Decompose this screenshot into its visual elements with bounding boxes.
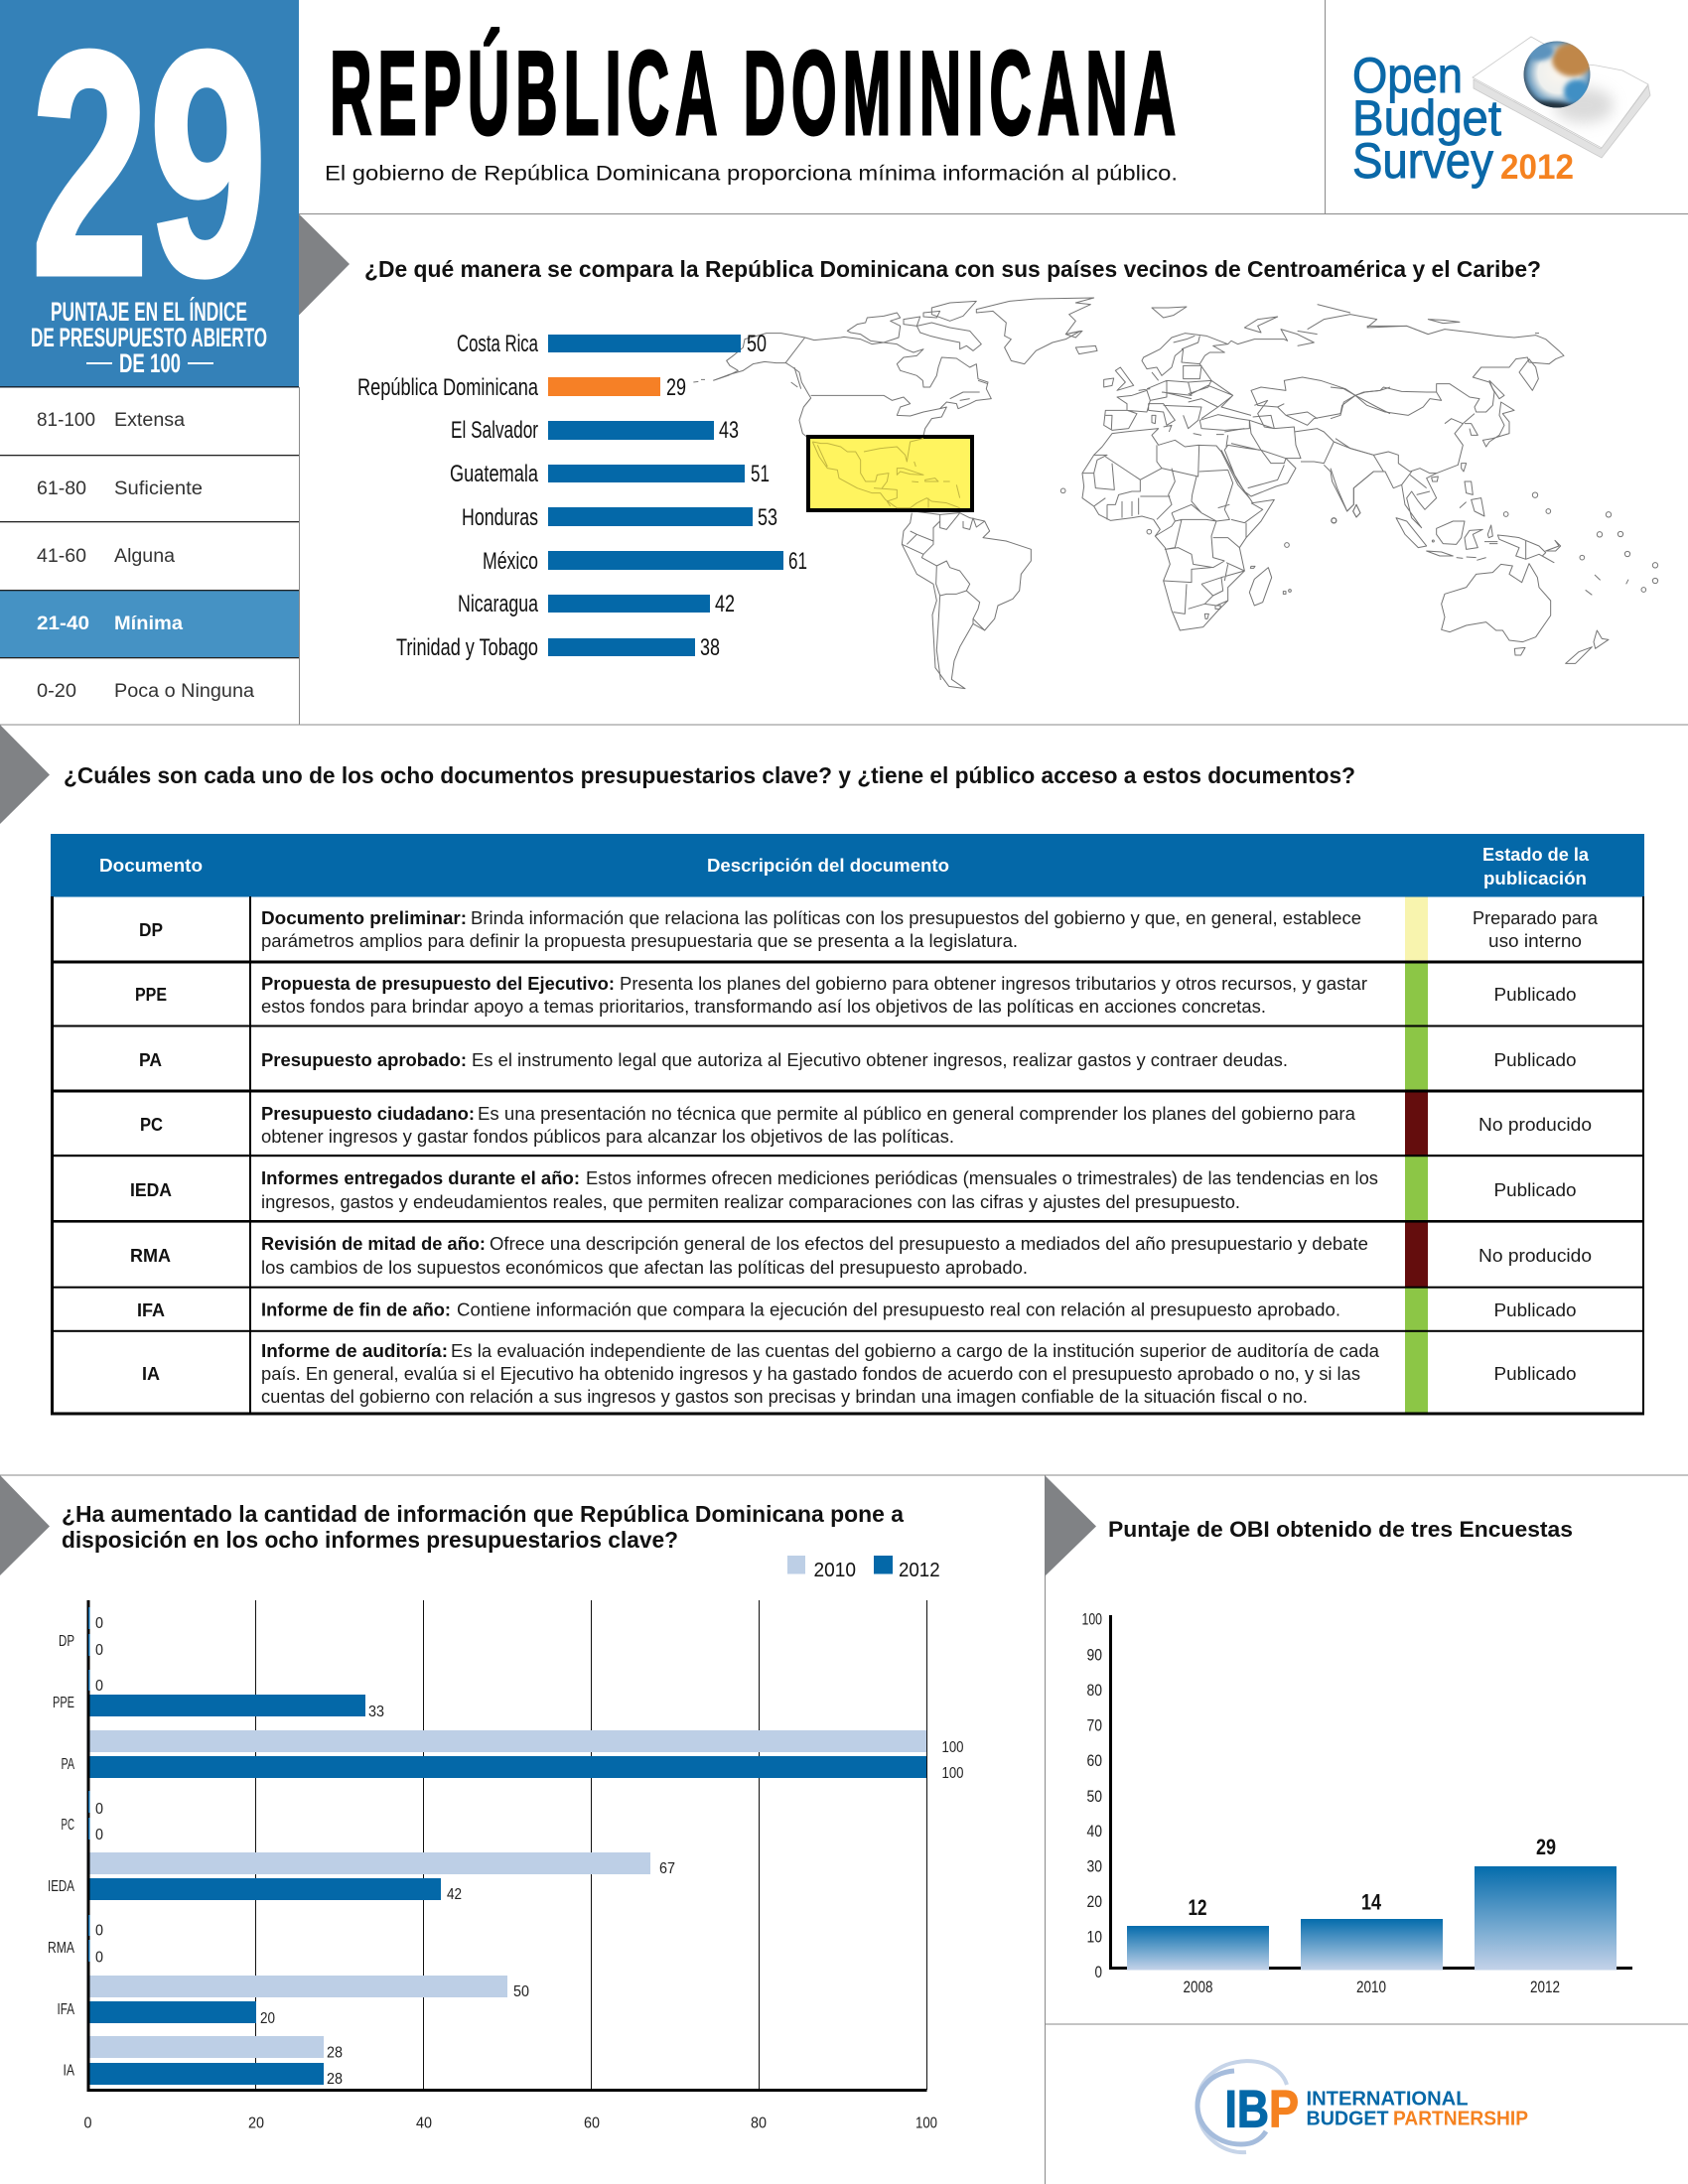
panel: score ranges legend: 0-20 xyxy=(37,681,76,702)
row: PA: Es el instrumento legal que autoriza al Ejecutivo obtener ingresos, realizar gastos y contraer deudas. xyxy=(472,1049,1288,1070)
México bar: 61 xyxy=(788,548,807,575)
row: IFA: Informe de fin de año: xyxy=(261,1298,451,1320)
chart value labels: 20 xyxy=(260,2010,275,2027)
logo: International Budget Partnership: P xyxy=(1269,2081,1299,2138)
row: IA: Publicado xyxy=(1493,1363,1577,1384)
chart value labels: 33 xyxy=(368,1704,384,1720)
y-axis labels: 0 xyxy=(1094,1963,1102,1981)
chart value labels: 0 xyxy=(95,1950,103,1966)
y-axis labels: 90 xyxy=(1086,1646,1102,1664)
logo: International Budget Partnership: IB xyxy=(1225,2081,1269,2138)
row: PPE xyxy=(135,973,1577,1017)
icon: IBP swoosh xyxy=(1197,2061,1287,2152)
chart x-axis labels: 60 xyxy=(584,2115,600,2132)
chart category labels: IEDA xyxy=(48,1878,74,1895)
row: RMA: los cambios de los supuestos económicos que afectan las políticas del presupuesto aprobado. xyxy=(261,1257,1028,1278)
row: IA: Es la evaluación independiente de las cuentas del gobierno a cargo de la institución superior de auditoría de cada xyxy=(451,1340,1380,1361)
row: DP xyxy=(139,907,1599,951)
chart x-axis labels: 40 xyxy=(416,2115,432,2132)
El Salvador bar: 43 xyxy=(719,417,739,444)
Nicaragua bar: 42 xyxy=(715,591,735,617)
heading: neighbours comparison: ¿De qué manera se compara la República Dominicana con sus países vecinos de Centroamérica y el Caribe? xyxy=(364,256,1541,282)
row: IA: Informe de auditoría: xyxy=(261,1340,448,1361)
row: PPE: Presenta los planes del gobierno para obtener ingresos tributarios y otros recursos, y gastar xyxy=(620,973,1367,994)
y-axis labels: 20 xyxy=(1086,1892,1102,1911)
map: Europe, Africa, Middle East xyxy=(1060,305,1428,630)
bar year labels xyxy=(1184,1978,1560,1996)
row: IFA xyxy=(137,1298,1577,1320)
bar value labels xyxy=(1188,1835,1556,1920)
row: IA: país. En general, evalúa si el Ejecutivo ha obtenido ingresos y ha gastado fondos de acuerdo con el presupuesto aprobado o no, y si las xyxy=(261,1363,1360,1384)
México bar xyxy=(483,548,807,575)
Honduras bar xyxy=(462,504,777,531)
status colour column xyxy=(1405,897,1428,1414)
row: PC xyxy=(140,1103,1592,1147)
panel: score ranges legend: Suficiente xyxy=(114,478,203,499)
map: Asia and Oceania xyxy=(1331,320,1658,663)
chart value labels: 28 xyxy=(327,2045,343,2061)
bar value labels: 12 xyxy=(1188,1895,1207,1920)
legend: 2010 and 2012 xyxy=(787,1556,940,1581)
icon: book and globe xyxy=(1473,37,1650,158)
score caption: DE PRESUPUESTO ABIERTO xyxy=(31,323,267,352)
panel: score ranges legend: Alguna xyxy=(114,546,175,567)
arrow: section 1 xyxy=(299,214,350,316)
logo: International Budget Partnership: PARTNERSHIP xyxy=(1393,2109,1528,2130)
chart category labels: DP xyxy=(59,1633,74,1650)
row: PC: obtener ingresos y gastar fondos públicos para alcanzar los objetivos de las políticas. xyxy=(261,1126,954,1147)
Honduras bar: 53 xyxy=(758,504,777,531)
bar value labels: 14 xyxy=(1361,1890,1382,1914)
Trinidad y Tobago bar: Trinidad y Tobago xyxy=(396,634,538,661)
table header: Documento xyxy=(99,855,203,876)
row: IEDA xyxy=(130,1167,1577,1212)
row: IFA: IFA xyxy=(137,1299,165,1320)
El Salvador bar xyxy=(451,417,739,444)
row: IEDA: ingresos, gastos y endeudamientos reales, que permiten realizar comparaciones con las cifras y ajustes del presupuesto. xyxy=(261,1191,1240,1212)
y-axis labels: 70 xyxy=(1086,1715,1102,1735)
heading: information availability: disposición en los ocho informes presupuestarios clave? xyxy=(62,1527,678,1553)
y-axis labels xyxy=(1082,1610,1102,1981)
map: Americas xyxy=(693,298,1094,689)
chart x-axis labels: 20 xyxy=(248,2115,264,2132)
row: PPE: Publicado xyxy=(1493,984,1577,1005)
chart value labels: 0 xyxy=(95,1642,103,1659)
bar year labels: 2010 xyxy=(1356,1978,1386,1996)
row: DP: DP xyxy=(139,919,163,940)
score caption: DE 100 xyxy=(119,348,181,378)
table: eight budget documents xyxy=(51,834,1644,1416)
Guatemala bar: 51 xyxy=(751,461,770,487)
table header: Descripción del documento xyxy=(707,855,949,876)
panel: score ranges legend: 21-40 xyxy=(37,614,89,634)
Costa Rica bar: 50 xyxy=(747,331,767,357)
logo: Open Budget Survey 2012: Survey xyxy=(1352,133,1493,189)
row: DP: Preparado para xyxy=(1473,907,1599,928)
row: PA: Presupuesto aprobado: xyxy=(261,1049,467,1070)
legend: 2010 and 2012: 2010 xyxy=(814,1560,856,1581)
Costa Rica bar: Costa Rica xyxy=(457,331,538,357)
row: IA: IA xyxy=(142,1363,160,1384)
y-axis labels: 50 xyxy=(1086,1787,1102,1806)
chart value labels: 100 xyxy=(941,1739,964,1756)
row: DP: uso interno xyxy=(1488,930,1582,951)
Nicaragua bar xyxy=(458,591,735,617)
bar year labels: 2012 xyxy=(1530,1978,1560,1996)
Trinidad y Tobago bar xyxy=(396,634,720,661)
y-axis labels: 60 xyxy=(1086,1751,1102,1770)
score caption: PUNTAJE EN EL ÍNDICE xyxy=(51,296,247,327)
row: DP: Brinda información que relaciona las políticas con los presupuestos del gobierno y que, en general, establece xyxy=(471,907,1361,928)
chart category labels: PPE xyxy=(53,1695,74,1711)
bar chart: documents 2010 vs 2012 xyxy=(48,1600,964,2132)
y-axis labels: 10 xyxy=(1086,1928,1102,1946)
y-axis labels: 40 xyxy=(1086,1822,1102,1841)
logo: International Budget Partnership xyxy=(1197,2061,1528,2152)
El Salvador bar: El Salvador xyxy=(451,417,538,444)
map: highlighted region xyxy=(808,437,972,510)
Guatemala bar: Guatemala xyxy=(450,461,538,487)
table header: Estado de la xyxy=(1482,844,1590,865)
South America xyxy=(902,511,1031,689)
row: PPE: PPE xyxy=(135,984,167,1005)
row: IA: cuentas del gobierno con relación a sus ingresos y gastos son precisas y brindan una imagen confiable de la situación fiscal o no. xyxy=(261,1386,1308,1407)
República Dominicana bar: 29 xyxy=(666,374,686,401)
score caption xyxy=(31,296,267,378)
row: IFA: Contiene información que compara la ejecución del presupuesto real con relación al presupuesto aprobado. xyxy=(457,1298,1340,1320)
bar value labels: 29 xyxy=(1536,1835,1556,1859)
row: PPE: estos fondos para brindar apoyo a temas prioritarios, transformando así los objetivos de las políticas en acciones concretas. xyxy=(261,996,1266,1017)
logo: Open Budget Survey 2012 xyxy=(1352,37,1650,189)
subtitle: El gobierno de República Dominicana proporciona mínima información al público. xyxy=(325,161,1178,185)
row: IA xyxy=(142,1340,1577,1407)
table header xyxy=(51,834,1644,897)
panel: score ranges legend: Mínima xyxy=(114,614,183,634)
y-axis labels: 100 xyxy=(1082,1610,1102,1628)
chart category labels: RMA xyxy=(48,1940,74,1957)
chart value labels xyxy=(95,1615,964,2088)
chart category labels: PA xyxy=(62,1756,74,1773)
chart value labels: 0 xyxy=(95,1678,103,1695)
panel: score ranges legend: Extensa xyxy=(114,410,185,431)
chart value labels: 28 xyxy=(327,2071,343,2088)
row: DP: Documento preliminar: xyxy=(261,907,467,928)
row: PPE: Propuesta de presupuesto del Ejecutivo: xyxy=(261,973,615,994)
row: RMA: Revisión de mitad de año: xyxy=(261,1233,486,1254)
row: DP: parámetros amplios para definir la propuesta presupuestaria que se presenta a la legislatura. xyxy=(261,930,1018,951)
y-axis labels: 80 xyxy=(1086,1681,1102,1700)
chart x-axis labels: 0 xyxy=(83,2115,92,2132)
chart x-axis labels xyxy=(83,2115,937,2132)
panel: score ranges legend: 41-60 xyxy=(37,546,86,567)
row: RMA: RMA xyxy=(130,1245,171,1266)
row: PA: Publicado xyxy=(1493,1049,1577,1070)
chart x-axis labels: 80 xyxy=(751,2115,767,2132)
heading: OBI scores: Puntaje de OBI obtenido de tres Encuestas xyxy=(1108,1517,1573,1542)
arrow: section 3 xyxy=(0,1475,50,1575)
República Dominicana bar: República Dominicana xyxy=(357,374,538,401)
panel: score ranges legend: 61-80 xyxy=(37,478,86,499)
table grid xyxy=(51,896,1644,1416)
Trinidad y Tobago bar: 38 xyxy=(700,634,720,661)
chart x-axis labels: 100 xyxy=(915,2115,937,2132)
heading: information availability: ¿Ha aumentado la cantidad de información que República Dominicana pone a xyxy=(62,1501,904,1527)
row: PC: Presupuesto ciudadano: xyxy=(261,1103,475,1124)
row: RMA: Ofrece una descripción general de los efectos del presupuesto a mediados del año presupuestario y debate xyxy=(490,1233,1368,1254)
row: IEDA: Estos informes ofrecen mediciones periódicas (mensuales o trimestrales) de las tendencias en los xyxy=(586,1167,1378,1188)
row: PC: Es una presentación no técnica que permite al público en general comprender los planes del gobierno para xyxy=(478,1103,1356,1124)
chart value labels: 0 xyxy=(95,1801,103,1818)
Guatemala bar xyxy=(450,461,770,487)
world map xyxy=(693,298,1658,689)
heading: information availability xyxy=(62,1501,904,1553)
bar year labels: 2008 xyxy=(1184,1978,1213,1996)
row: PA xyxy=(139,1049,1577,1070)
bar chart: country comparison xyxy=(357,331,807,661)
panel: score ranges legend: Poca o Ninguna xyxy=(114,681,254,702)
logo: International Budget Partnership: BUDGET xyxy=(1307,2109,1388,2130)
chart value labels: 100 xyxy=(941,1765,964,1782)
chart value labels: 0 xyxy=(95,1922,103,1940)
row: IEDA: Publicado xyxy=(1493,1179,1577,1200)
chart value labels: 0 xyxy=(95,1827,103,1843)
logo: Open Budget Survey 2012: 2012 xyxy=(1500,148,1574,187)
chart category labels: IFA xyxy=(58,2001,74,2018)
arrow: section 2 xyxy=(0,725,50,824)
y-axis labels: 30 xyxy=(1086,1856,1102,1876)
panel: score ranges legend: 81-100 xyxy=(37,410,95,431)
row: IEDA: Informes entregados durante el año: xyxy=(261,1167,580,1188)
panel: score sidebar xyxy=(0,0,299,387)
chart value labels: 0 xyxy=(95,1615,103,1632)
row: PA: PA xyxy=(139,1049,162,1070)
chart value labels: 42 xyxy=(447,1886,462,1903)
chart category labels: PC xyxy=(62,1817,74,1834)
chart category labels: IA xyxy=(64,2063,74,2079)
arrow: section 4 xyxy=(1045,1475,1096,1576)
legend: 2010 and 2012: 2012 xyxy=(899,1560,940,1581)
bar chart: OBI scores over three surveys xyxy=(1082,1610,1632,1996)
row: RMA: No producido xyxy=(1478,1245,1592,1266)
chart value labels: 67 xyxy=(659,1860,675,1877)
logo: Open Budget Survey 2012: Open xyxy=(1352,48,1463,103)
chart category labels xyxy=(48,1633,74,2079)
Honduras bar: Honduras xyxy=(462,504,538,531)
row: PC: PC xyxy=(140,1114,163,1135)
México bar: México xyxy=(483,548,538,575)
row: PC: No producido xyxy=(1478,1114,1592,1135)
Nicaragua bar: Nicaragua xyxy=(458,591,538,617)
logo: International Budget Partnership: INTERNATIONAL xyxy=(1307,2089,1468,2111)
logo: Open Budget Survey 2012: Budget xyxy=(1352,90,1501,146)
row: IEDA: IEDA xyxy=(130,1179,172,1200)
panel: score ranges legend xyxy=(0,386,300,725)
table header: publicación xyxy=(1483,868,1587,888)
row: RMA xyxy=(130,1233,1592,1278)
Costa Rica bar xyxy=(457,331,767,357)
heading: key documents: ¿Cuáles son cada uno de los ocho documentos presupuestarios clave? y ¿tiene el público acceso a estos documentos? xyxy=(64,762,1355,788)
row: IFA: Publicado xyxy=(1493,1299,1577,1320)
chart value labels: 50 xyxy=(513,1983,529,2000)
